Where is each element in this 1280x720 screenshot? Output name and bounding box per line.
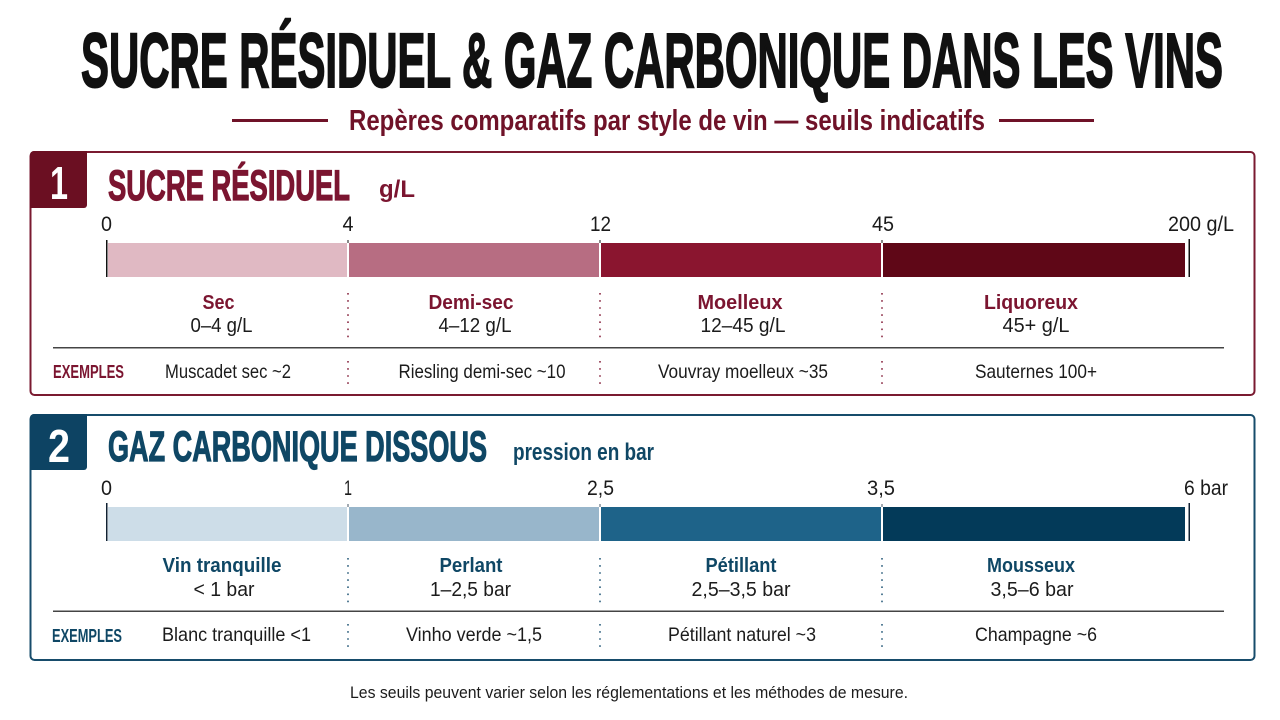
- unit: g/L: [379, 176, 415, 203]
- category labels: pressure: 3,5–6 bar: [990, 579, 1074, 601]
- examples label: pressure: EXEMPLES: [52, 626, 122, 646]
- scale values: sugar: 45: [872, 213, 894, 236]
- category labels: sugar: Sec: [202, 292, 234, 314]
- scale values: pressure: 6 bar: [1184, 477, 1228, 500]
- badge 2: [30, 414, 87, 472]
- scale bar: pressure: [106, 503, 1190, 541]
- category labels: sugar: Moelleux: [698, 292, 782, 314]
- category labels: sugar: Demi-sec: [428, 292, 514, 314]
- scale bar: sugar: [106, 239, 1190, 277]
- examples: sugar: Riesling demi-sec ~10: [398, 361, 566, 383]
- subtitle: Repères comparatifs par style de vin — seuils indicatifs: [349, 105, 985, 137]
- scale values: pressure: 2,5: [587, 477, 614, 500]
- examples: sugar: Muscadet sec ~2: [165, 361, 291, 383]
- examples label: sugar: EXEMPLES: [53, 362, 124, 382]
- category labels: pressure: [162, 555, 1075, 601]
- category labels: pressure: Pétillant: [706, 555, 777, 577]
- category labels: sugar: 0–4 g/L: [190, 315, 252, 337]
- scale values: sugar: 12: [590, 213, 611, 236]
- category labels: sugar: 45+ g/L: [1002, 315, 1070, 337]
- scale values: sugar: 4: [342, 213, 354, 236]
- unit: pression en bar: [513, 439, 654, 466]
- category labels: sugar: Liquoreux: [984, 292, 1078, 314]
- scale values: sugar: 200 g/L: [1168, 213, 1234, 236]
- examples: pressure: Blanc tranquille <1: [162, 624, 311, 646]
- scale values: pressure: 3,5: [867, 477, 895, 500]
- category labels: sugar: 4–12 g/L: [438, 315, 512, 337]
- scale values: sugar: 0: [101, 213, 112, 236]
- heading: gaz carbonique dissous: GAZ CARBONIQUE DISSOUS: [108, 423, 487, 471]
- category labels: pressure: < 1 bar: [194, 579, 255, 601]
- panel: sucre résiduel: [30, 151, 1254, 395]
- category labels: pressure: 1–2,5 bar: [430, 579, 511, 601]
- examples: pressure: Champagne ~6: [975, 624, 1097, 646]
- scale values: pressure: 0: [101, 477, 112, 500]
- examples: pressure: Pétillant naturel ~3: [668, 624, 816, 646]
- examples: sugar: Sauternes 100+: [975, 361, 1097, 383]
- heading: sucre résiduel: SUCRE RÉSIDUEL: [108, 162, 350, 210]
- badge 1: [30, 151, 87, 209]
- badge 1: 1: [50, 157, 68, 209]
- category labels: pressure: Mousseux: [987, 555, 1075, 577]
- scale values: pressure: 1: [344, 477, 352, 500]
- category labels: sugar: [190, 292, 1078, 337]
- category labels: pressure: Perlant: [440, 555, 503, 577]
- examples: sugar: [165, 361, 1097, 383]
- category labels: sugar: 12–45 g/L: [700, 315, 786, 337]
- examples: pressure: Vinho verde ~1,5: [406, 624, 542, 646]
- category labels: pressure: Vin tranquille: [162, 555, 282, 577]
- scale values: pressure: [101, 477, 1228, 500]
- examples: sugar: Vouvray moelleux ~35: [658, 361, 828, 383]
- badge 2: 2: [48, 420, 70, 472]
- panel: gaz carbonique: [30, 414, 1254, 660]
- footnote: Les seuils peuvent varier selon les réglementations et les méthodes de mesure.: [350, 683, 908, 702]
- category labels: pressure: 2,5–3,5 bar: [692, 579, 791, 601]
- scale values: sugar: [101, 213, 1234, 236]
- examples: pressure: [162, 624, 1097, 646]
